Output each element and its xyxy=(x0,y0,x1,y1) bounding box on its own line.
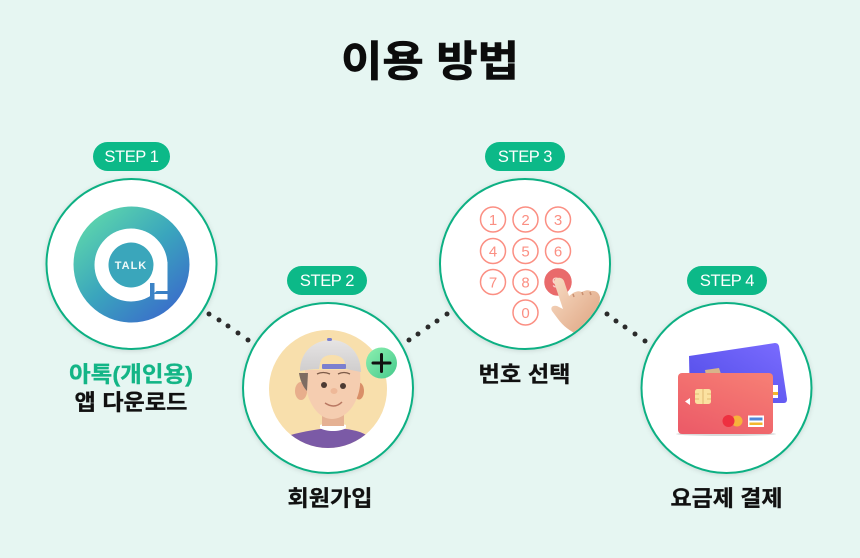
icon: avatar xyxy=(269,330,387,456)
icon: TALK app logo: TALK xyxy=(115,260,147,272)
keypad: 8 xyxy=(521,274,530,292)
badge: step 3: STEP 3 xyxy=(498,148,552,166)
dotted connector: step 2 to step 3 xyxy=(406,312,450,342)
badge: step 2 xyxy=(287,266,367,295)
badge: step 2: STEP 2 xyxy=(300,272,354,290)
badge: step 1: STEP 1 xyxy=(104,148,159,166)
keypad: 3 xyxy=(554,212,562,229)
keypad: 5 xyxy=(521,244,530,260)
panel: step 2 xyxy=(243,266,413,511)
icon: plus badge xyxy=(366,348,397,378)
icon: TALK app logo xyxy=(74,206,190,322)
circle frame: step 1 xyxy=(46,179,216,349)
panel: step 4 xyxy=(642,266,812,511)
keypad: 4 xyxy=(489,244,497,260)
dotted connector: step 1 to step 2 xyxy=(206,312,250,342)
keypad xyxy=(480,207,571,325)
keypad: 2 xyxy=(521,212,530,229)
icon: pointing hand xyxy=(551,278,600,335)
badge: step 4: STEP 4 xyxy=(700,272,754,290)
panel: step 3 xyxy=(440,142,610,387)
label: step 1: 앱 다운로드 xyxy=(74,390,188,415)
badge: step 3 xyxy=(485,142,565,171)
badge: step 1 xyxy=(93,142,170,171)
circle frame: step 4 xyxy=(642,303,812,473)
panel: step 1 xyxy=(46,142,216,415)
label: step 2: 회원가입 xyxy=(288,486,372,511)
circle frame: step 3 xyxy=(440,179,610,349)
keypad: 0 xyxy=(521,305,530,322)
badge: step 4 xyxy=(687,266,767,295)
keypad: 6 xyxy=(554,244,562,260)
title: 이용 방법 xyxy=(341,38,519,85)
dotted connector: step 3 to step 4 xyxy=(604,312,648,344)
label: step 4: 요금제 결제 xyxy=(670,486,782,511)
keypad: 7 xyxy=(489,274,497,292)
label: step 1: 아톡(개인용) xyxy=(69,362,193,387)
keypad: 9 xyxy=(552,274,560,292)
label: step 3: 번호 선택 xyxy=(478,362,570,387)
keypad: 1 xyxy=(489,212,497,229)
circle frame: step 2 xyxy=(243,303,413,473)
icon: credit cards xyxy=(676,343,787,436)
label: step 1 xyxy=(69,362,193,415)
